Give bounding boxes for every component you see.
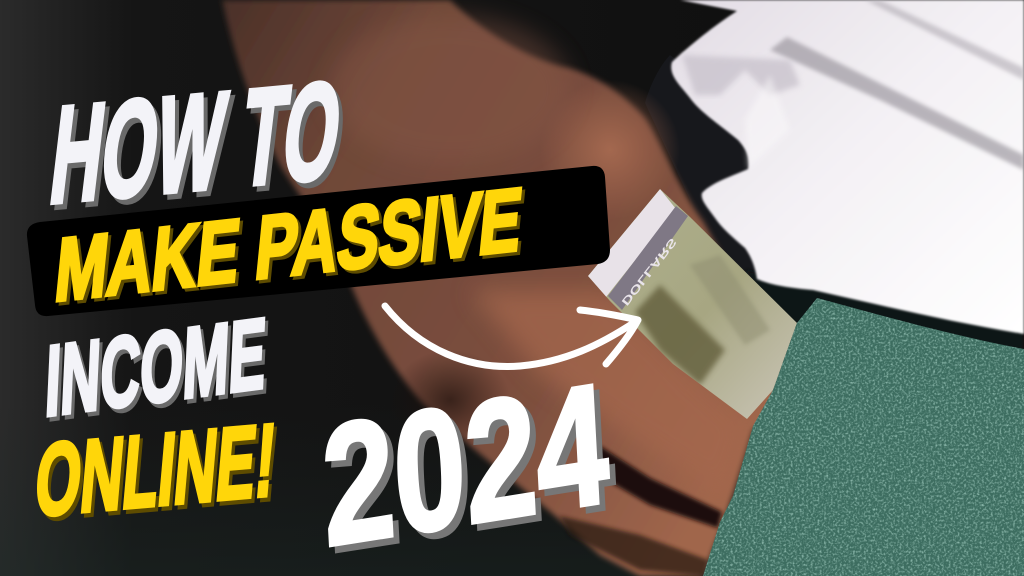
lower finger gap bbox=[560, 516, 708, 576]
black label box bbox=[27, 166, 610, 316]
knuckle highlight bbox=[540, 80, 680, 220]
heading: MAKE PASSIVE bbox=[51, 168, 529, 323]
heading: INCOME: INCOME bbox=[46, 302, 271, 442]
hand bbox=[222, 0, 800, 576]
bill printed band bbox=[608, 206, 688, 310]
heading: ONLINE! bbox=[31, 402, 283, 542]
bill white edge bbox=[588, 189, 676, 297]
heading: MAKE PASSIVE: MAKE PASSIVE bbox=[51, 168, 526, 320]
dark band under shirt bbox=[745, 270, 1024, 356]
shirt fold shadows bbox=[770, 37, 1024, 170]
index finger highlight bbox=[470, 290, 750, 500]
heading: ONLINE!: ONLINE! bbox=[31, 402, 280, 538]
heading: INCOME bbox=[43, 298, 271, 442]
bill lettering: DOLLARS bbox=[619, 236, 679, 308]
heading: INCOME: INCOME bbox=[43, 298, 268, 438]
green trousers bbox=[690, 290, 1024, 576]
bill engraving bbox=[635, 285, 725, 385]
heading: HOW TO bbox=[43, 53, 353, 238]
curved arrow bbox=[385, 306, 638, 366]
finger gap shadow bbox=[590, 446, 722, 528]
top hand highlight bbox=[330, 15, 570, 165]
rolled dollar bill bbox=[588, 189, 797, 419]
dark sleeve behind the hand bbox=[645, 55, 800, 330]
heading: HOW TO: HOW TO bbox=[47, 58, 353, 238]
heading: MAKE PASSIVE: MAKE PASSIVE bbox=[54, 171, 529, 323]
heading: HOW TO: HOW TO bbox=[43, 53, 349, 233]
year: 2024: 2024 bbox=[318, 348, 612, 576]
crease shadow between hand and finger bbox=[390, 350, 510, 450]
heading: ONLINE!: ONLINE! bbox=[34, 406, 283, 542]
white shirt bbox=[671, 0, 1024, 334]
